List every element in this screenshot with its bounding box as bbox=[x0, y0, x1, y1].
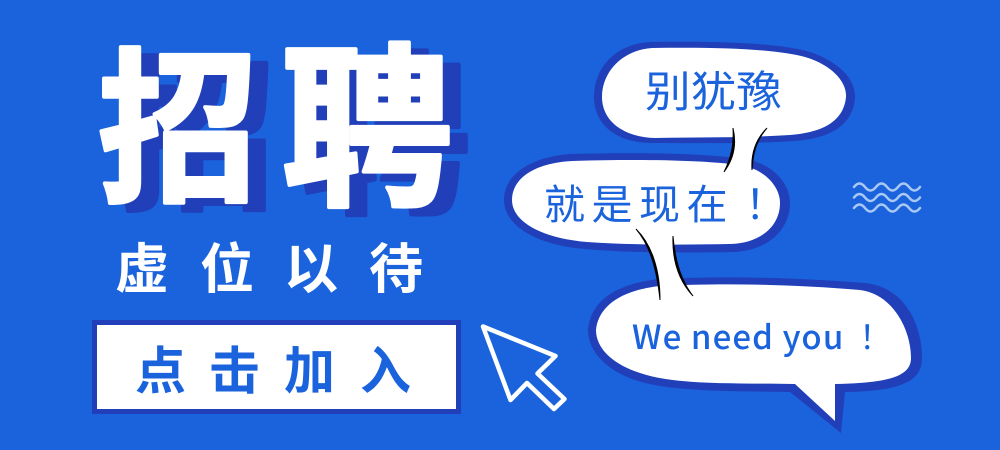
connector: middle to bottom bubble bbox=[636, 229, 693, 300]
button: 点击加入: 击 bbox=[209, 330, 260, 404]
icon: mouse cursor bbox=[483, 326, 564, 409]
speech bubble: We need you !: We need you bbox=[632, 311, 844, 359]
subtitle: 虚位以待: 位 bbox=[200, 225, 254, 304]
button: 点击加入: 点 bbox=[135, 330, 186, 404]
subtitle: 虚位以待: 以 bbox=[284, 225, 338, 304]
title: 招聘 with offset shadow: 聘 bbox=[299, 0, 471, 251]
speech bubble: We need you !: ！ bbox=[859, 311, 892, 359]
speech bubble: 就是现在！: 就是现在 bbox=[544, 171, 734, 231]
speech bubble: 就是现在！ bbox=[504, 153, 790, 253]
connector: top to middle bubble bbox=[724, 128, 767, 172]
subtitle: 虚位以待: 待 bbox=[369, 225, 423, 304]
title: 招聘 with offset shadow bbox=[98, 0, 471, 251]
speech bubble: We need you ! bbox=[588, 277, 922, 433]
title: 招聘 with offset shadow: 招 bbox=[98, 0, 258, 236]
speech bubble: 就是现在！: ！ bbox=[745, 171, 786, 231]
speech bubble: 别犹豫: 别犹豫 bbox=[645, 58, 782, 120]
icon: waves bbox=[854, 184, 920, 212]
speech bubble: 别犹豫 bbox=[594, 42, 855, 143]
title: 招聘 with offset shadow: 招 bbox=[116, 3, 276, 244]
button: 点击加入: 加 bbox=[284, 330, 335, 404]
button: 点击加入 bbox=[94, 322, 458, 412]
button: 点击加入: 入 bbox=[360, 330, 411, 404]
subtitle: 虚位以待 bbox=[115, 225, 423, 304]
subtitle: 虚位以待: 虚 bbox=[115, 225, 169, 304]
